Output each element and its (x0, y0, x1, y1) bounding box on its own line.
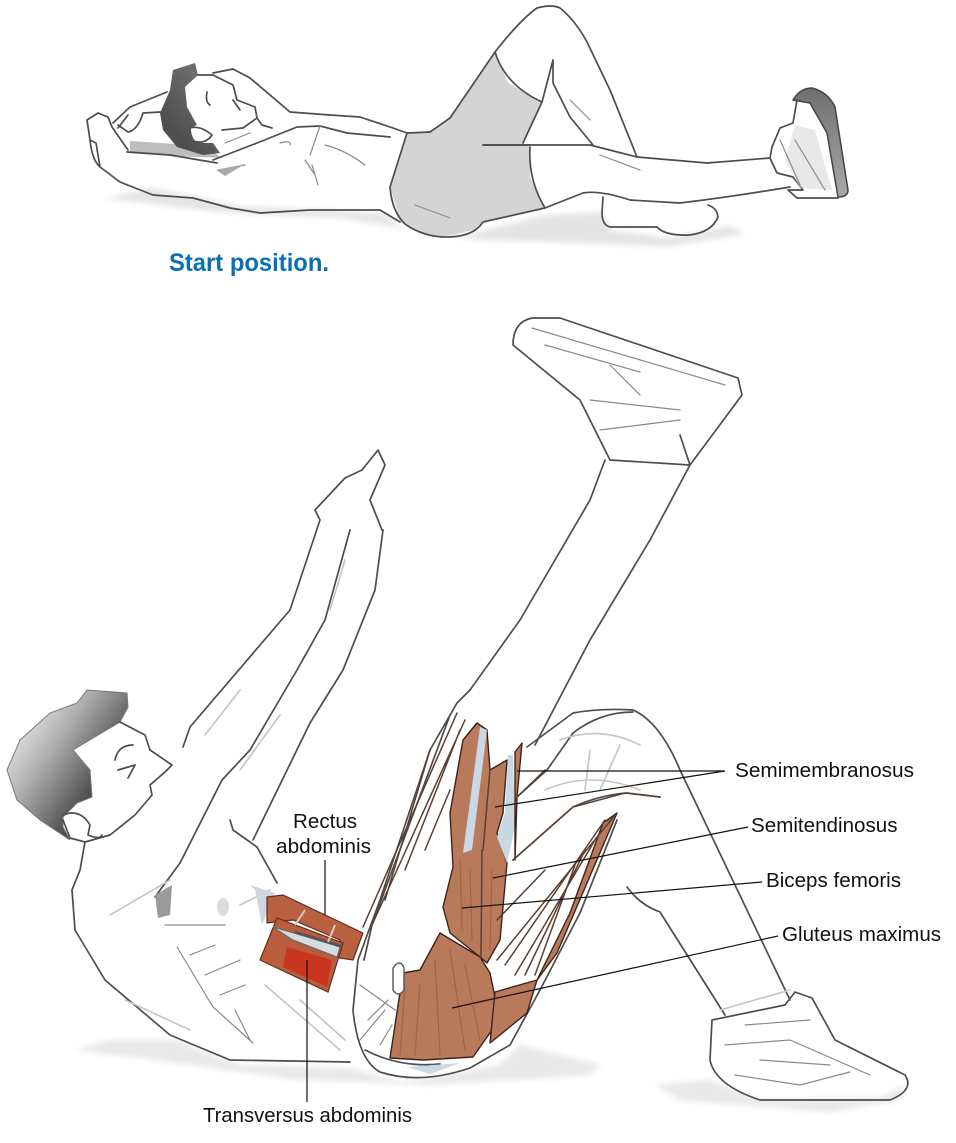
label: semitendinosus (493, 814, 898, 878)
body detail (218, 126, 365, 185)
foot on the floor (602, 197, 718, 235)
illustration: man in crunch with raised legs (7, 318, 908, 1112)
raised shoe (513, 318, 742, 465)
hip and thigh outline (353, 690, 617, 1078)
hands (87, 92, 167, 167)
label: semitendinosus: Semitendinosus (751, 814, 898, 837)
caption: start position: Start position. (169, 249, 329, 277)
label: biceps femoris: Biceps femoris (766, 869, 901, 892)
hair (160, 63, 220, 155)
raised bent leg (450, 6, 637, 157)
label: rectus abdominis: Rectus (293, 810, 357, 833)
face (190, 75, 272, 142)
label: semimembranosus (495, 759, 914, 807)
torso and arms (90, 69, 430, 222)
label: rectus abdominis: abdominis (276, 835, 371, 858)
shorts outline (390, 52, 545, 237)
label: rectus abdominis (276, 810, 371, 915)
planted shoe (710, 992, 908, 1100)
raised leg (470, 460, 690, 745)
labels and leader lines (203, 759, 941, 1127)
chest detail (155, 885, 275, 925)
abdominal muscles (260, 895, 363, 992)
hair (7, 690, 128, 840)
label: semimembranosus: Semimembranosus (735, 759, 914, 782)
label: gluteus maximus (452, 923, 941, 1008)
bent leg (513, 709, 790, 1015)
arms and hands (155, 450, 385, 897)
label: biceps femoris (462, 869, 901, 908)
extended leg (483, 145, 790, 208)
shorts (390, 52, 545, 237)
raised shoe (770, 88, 848, 198)
illustration: man lying in start position (87, 6, 848, 246)
hamstring and gluteal muscles (360, 713, 660, 1074)
floor shadow (75, 1040, 905, 1112)
label: gluteus maximus: Gluteus maximus (782, 923, 941, 946)
label: transversus abdominis: Transversus abdominis (203, 1104, 412, 1127)
tendons and adductor lines (363, 713, 660, 975)
bent leg thigh detail (545, 734, 790, 1010)
face (63, 722, 172, 842)
torso (72, 820, 350, 1062)
